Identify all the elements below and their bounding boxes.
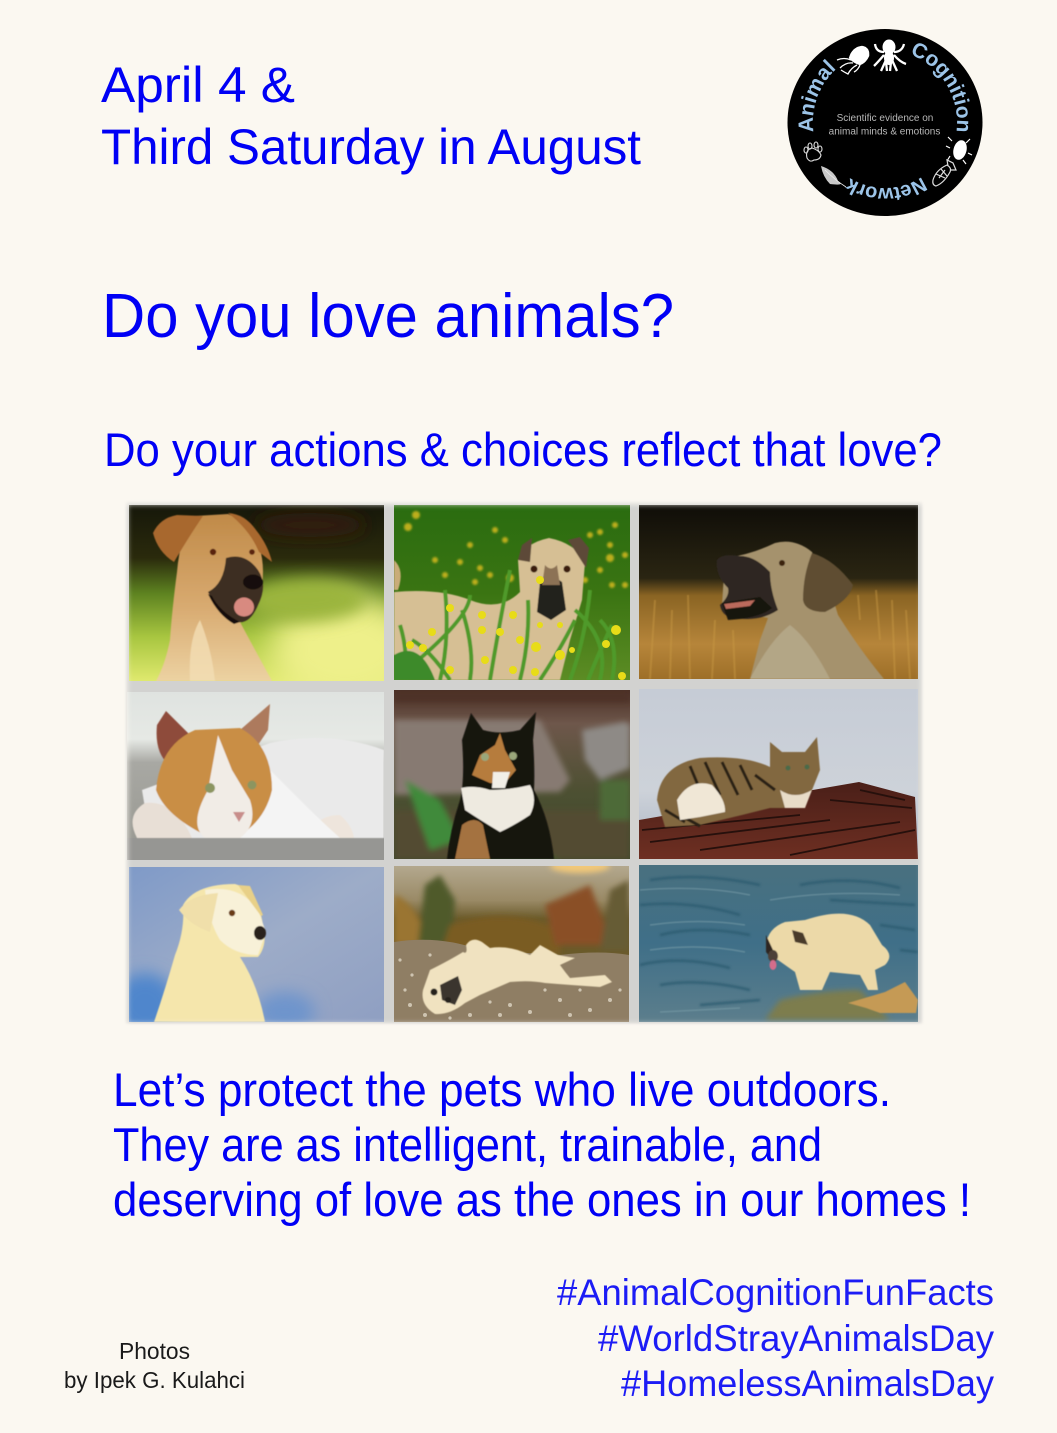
hashtags: #HomelessAnimalsDay (621, 1363, 994, 1404)
photo: calico cat among stones (394, 690, 630, 860)
icon: octopus (874, 40, 906, 71)
photo credit: Photos (119, 1338, 190, 1364)
heading: Do you love animals?: Do you love animals? (102, 282, 674, 351)
logo tagline: Scientific evidence on (837, 113, 933, 124)
icon: jellyfish (837, 46, 869, 74)
photo: tan dog on green background (129, 505, 384, 681)
hashtags: #WorldStrayAnimalsDay (598, 1318, 994, 1359)
message: protect pets outdoors: Let’s protect the pets who live outdoors. (113, 1063, 891, 1116)
logo word: Cognition: Cognition (912, 43, 970, 132)
subheading: actions and choices: Do your actions & choices reflect that love? (104, 423, 942, 476)
message: protect pets outdoors: deserving of love as the ones in our homes ! (113, 1173, 971, 1226)
logo word: Network: Network (845, 178, 928, 200)
message: protect pets outdoors: They are as intelligent, trainable, and (113, 1118, 822, 1171)
photo: cream dog wading in water (639, 865, 918, 1022)
photo: dog among yellow flowers (394, 505, 630, 680)
logo: Animal Cognition Network badge (788, 29, 982, 216)
icon: paw print (804, 142, 822, 161)
message: protect pets outdoors (113, 1063, 971, 1226)
logo word: Animal: Animal (798, 58, 836, 132)
hashtags (557, 1272, 994, 1404)
photo: orange and white cat lying down (127, 692, 384, 860)
photo credit (64, 1338, 245, 1393)
photo: dog rolling on gravel at sunset (394, 859, 629, 1022)
logo tagline (829, 113, 940, 138)
photo: tabby cat on a roof (639, 689, 918, 859)
heading: dates (101, 57, 641, 175)
photo: cream puppy on blue sky (129, 867, 384, 1022)
icon: beetle (946, 137, 972, 164)
photo grid soft feathered edges (116, 488, 933, 1038)
logo tagline: animal minds & emotions (829, 126, 940, 138)
grid backing (125, 501, 923, 1024)
icon: feather (821, 166, 846, 187)
photo: dog in profile at golden field (639, 505, 918, 679)
photo credit: by Ipek G. Kulahci (64, 1367, 245, 1393)
photo grid (113, 488, 933, 1038)
heading: dates: April 4 & (101, 57, 295, 113)
heading: dates: Third Saturday in August (101, 119, 641, 175)
icon: fish (933, 160, 956, 186)
hashtags: #AnimalCognitionFunFacts (557, 1272, 994, 1313)
